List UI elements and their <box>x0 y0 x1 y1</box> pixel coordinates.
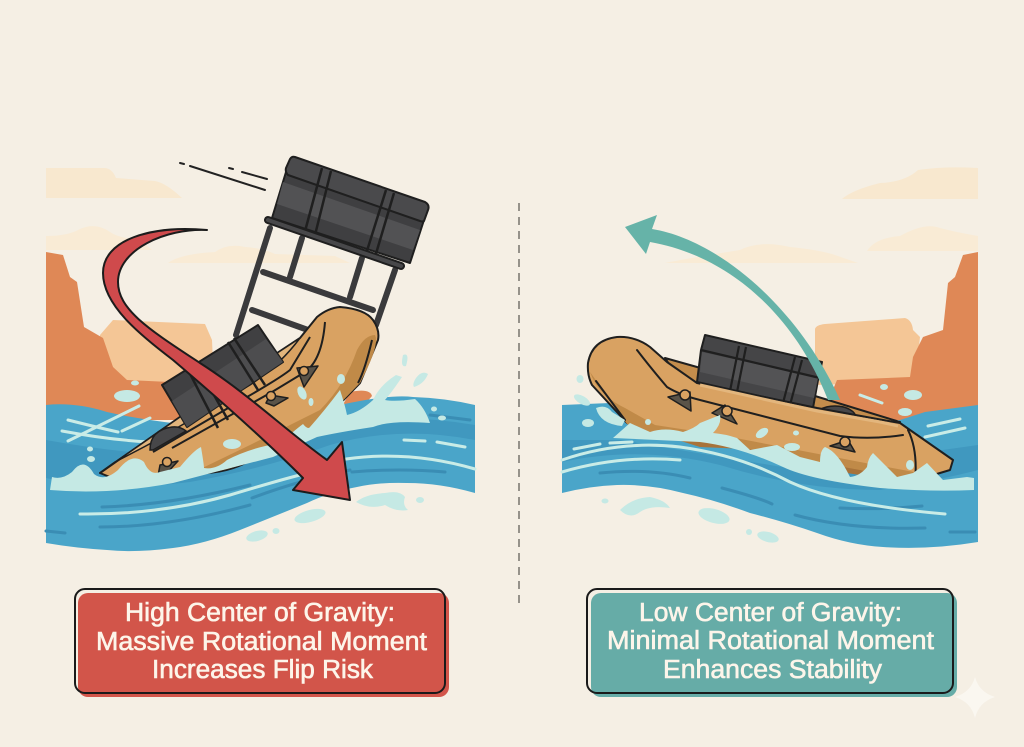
inflatable raft, tilted <box>100 307 378 480</box>
panel: low center of gravity scene <box>562 167 978 548</box>
far crate and boat <box>100 157 429 480</box>
arrow: large red rotational moment <box>103 229 350 500</box>
water foam splash <box>572 375 974 545</box>
low crate on raft <box>162 325 283 428</box>
raft far tube <box>665 358 900 440</box>
arrow: small teal rotational moment <box>625 215 840 400</box>
callout: low center of gravity: Minimal Rotational Moment <box>607 627 934 655</box>
callout: low center of gravity: Enhances Stability <box>663 656 882 684</box>
high crate on frame <box>272 157 429 263</box>
canyon cliffs <box>46 252 372 420</box>
callout: high center of gravity: High Center of Gravity: <box>125 599 395 627</box>
wheel behind tube <box>150 427 186 450</box>
spare wheel <box>814 406 856 430</box>
D-ring straps <box>158 366 318 476</box>
icon: sparkle watermark <box>955 677 995 718</box>
raft hull <box>588 337 953 482</box>
motion lines <box>180 163 267 190</box>
river water <box>46 396 475 551</box>
callout: low center of gravity <box>587 589 957 697</box>
background clouds <box>665 167 978 263</box>
callout: high center of gravity <box>75 589 449 697</box>
panel: high center of gravity scene <box>46 157 475 551</box>
low crate <box>697 335 822 408</box>
callout: high center of gravity: Massive Rotational Moment <box>96 628 427 656</box>
frame top bar <box>268 220 401 266</box>
background clouds <box>46 168 350 263</box>
raft with low load <box>588 335 953 482</box>
river water <box>562 395 978 548</box>
D-ring straps <box>668 390 855 452</box>
callout: high center of gravity: Increases Flip Risk <box>152 656 373 684</box>
canyon cliffs <box>815 252 978 420</box>
tall frame on raised load <box>236 228 395 335</box>
raft seams <box>596 350 916 482</box>
water foam splash <box>50 354 446 544</box>
raft hull shading <box>590 372 930 482</box>
callout: low center of gravity: Low Center of Gravity: <box>639 599 902 627</box>
divider <box>518 203 520 607</box>
